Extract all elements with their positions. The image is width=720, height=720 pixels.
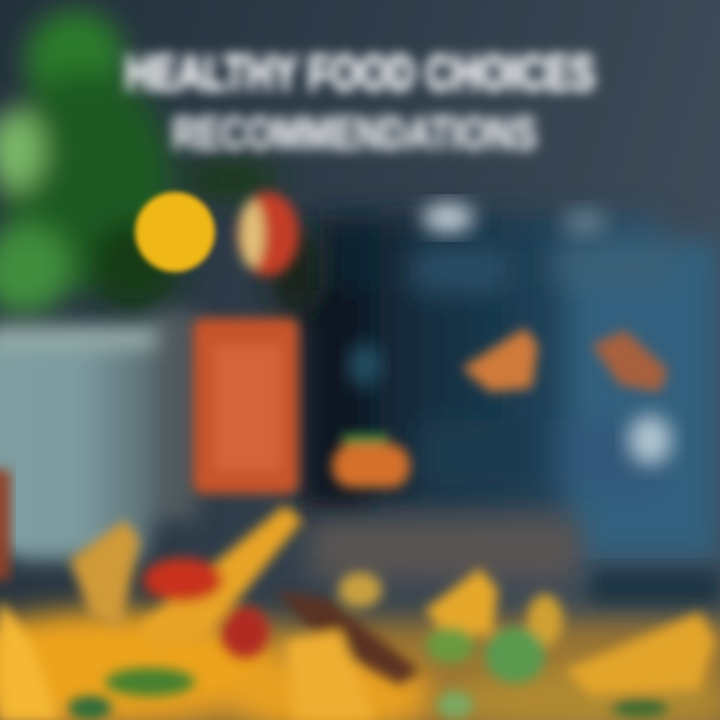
icon: orange pill	[332, 434, 410, 488]
plant: green leaves	[0, 10, 320, 315]
panel: dark lower right band	[590, 570, 720, 610]
food: fries foreground	[0, 505, 720, 720]
board heading: right	[563, 208, 607, 236]
board heading: left	[422, 203, 474, 233]
left edge red item	[0, 470, 10, 580]
bucket	[0, 310, 197, 560]
icon: lemon	[135, 192, 215, 272]
icon: apple slice	[237, 192, 299, 276]
panel: dark blue info board	[300, 215, 720, 560]
icon: orange chip centre	[462, 328, 538, 392]
title: RECOMMENDATIONS	[172, 107, 537, 159]
icon: small circle	[349, 343, 381, 387]
panel: lower wood band	[310, 520, 580, 580]
icon: white glow	[628, 415, 672, 465]
title	[125, 45, 595, 159]
icon: orange chip right	[592, 330, 668, 392]
orange card	[193, 318, 299, 494]
